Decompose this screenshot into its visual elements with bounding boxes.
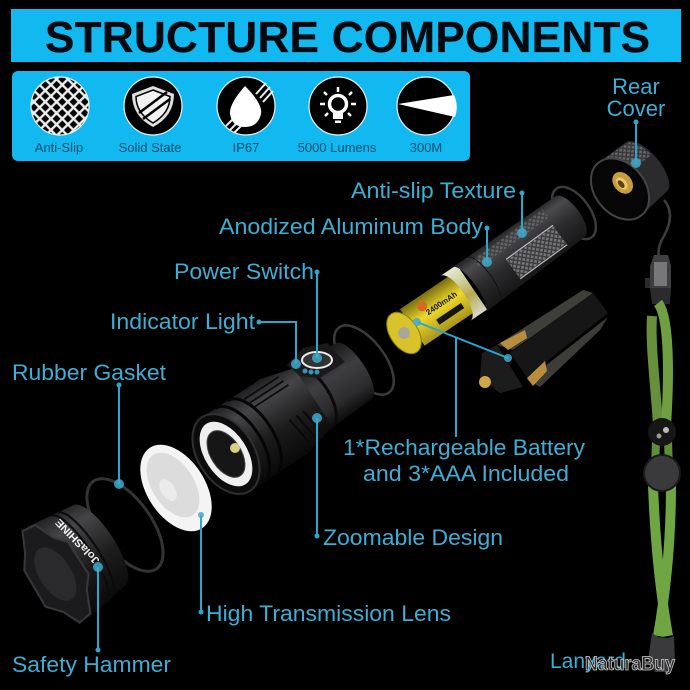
icon: anti-slip: Anti-Slip (35, 140, 83, 155)
label: rubber gasket: Rubber Gasket (12, 360, 166, 385)
battery: 2400mAh (424, 290, 459, 317)
panel: feature icons (12, 71, 470, 161)
safety hammer bezel (4, 491, 142, 634)
label: anti-slip texture: Anti-slip Texture (351, 178, 516, 203)
rear cover cap (579, 132, 679, 231)
label: power switch: Power Switch (174, 259, 314, 284)
icon: IP67 water drop: IP67 (233, 140, 259, 155)
icon: 5000 lumens bulb (298, 77, 377, 155)
AAA battery holder (479, 290, 608, 393)
label: rear cover: Rear (612, 74, 660, 99)
label: safety hammer: Safety Hammer (12, 652, 171, 677)
watermark: NaturaBuy (585, 654, 675, 675)
tube gasket ring (543, 179, 605, 247)
label: indicator light: Indicator Light (110, 309, 255, 334)
icon: solid state (119, 77, 182, 155)
label: zoomable design (312, 413, 503, 550)
icon: 300M beam: 300M (410, 140, 442, 155)
label: high transmission lens: High Transmission Lens (206, 601, 451, 626)
label: anodized aluminum body (219, 214, 492, 267)
label: rechargeable battery: and 3*AAA Included (363, 461, 569, 486)
battery (377, 265, 487, 363)
label: indicator light (110, 309, 320, 374)
lanyard (644, 200, 680, 672)
front gasket ring (72, 466, 178, 584)
label: power switch (174, 259, 322, 363)
label: safety hammer (12, 562, 171, 677)
icon: solid state: Solid State (119, 140, 181, 155)
label: high transmission lens (198, 512, 451, 626)
icon: IP67 water drop (217, 77, 275, 155)
icon: 300M beam (397, 77, 457, 155)
lens (126, 432, 226, 544)
switch gasket ring (323, 315, 405, 405)
label: rechargeable battery (343, 318, 585, 486)
label: rechargeable battery: 1*Rechargeable Battery (343, 435, 585, 460)
title banner: STRUCTURE COMPONENTS (45, 13, 650, 62)
label: rear cover (607, 74, 665, 168)
flashlight head (179, 328, 388, 506)
label: anodized aluminum body: Anodized Aluminum Body (219, 214, 483, 239)
label: anti-slip texture (351, 178, 527, 238)
safety hammer bezel: JolaSHINE (53, 516, 102, 566)
label: zoomable design: Zoomable Design (323, 525, 503, 550)
anodized aluminum body tube (453, 188, 595, 313)
icon: 5000 lumens bulb: 5000 Lumens (298, 140, 377, 155)
label: rubber gasket (12, 360, 166, 489)
icon: anti-slip (31, 77, 89, 155)
label: rear cover: Cover (607, 96, 665, 121)
label: lanyard: Lanyard (550, 650, 626, 673)
